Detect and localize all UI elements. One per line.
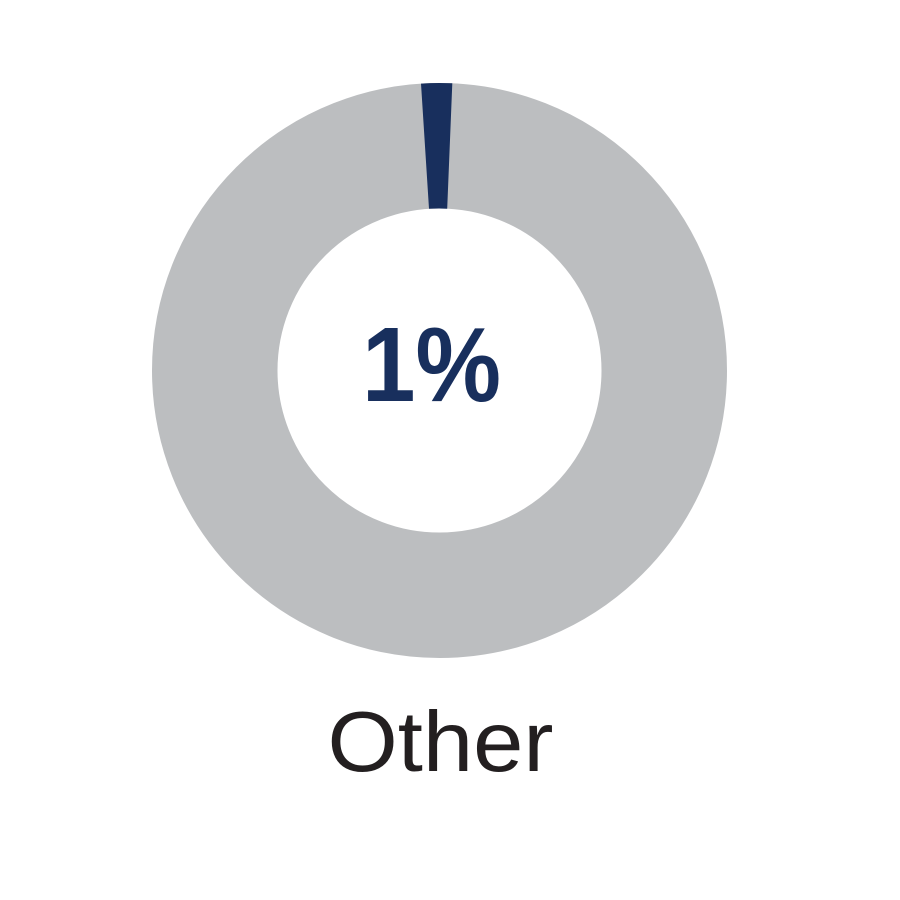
donut chart xyxy=(215,83,664,595)
donut segment: 1 percent xyxy=(421,83,452,209)
label: Other: Other xyxy=(328,695,554,790)
donut remainder: grey ring xyxy=(215,146,664,595)
center value: 1%: 1% xyxy=(362,306,501,424)
